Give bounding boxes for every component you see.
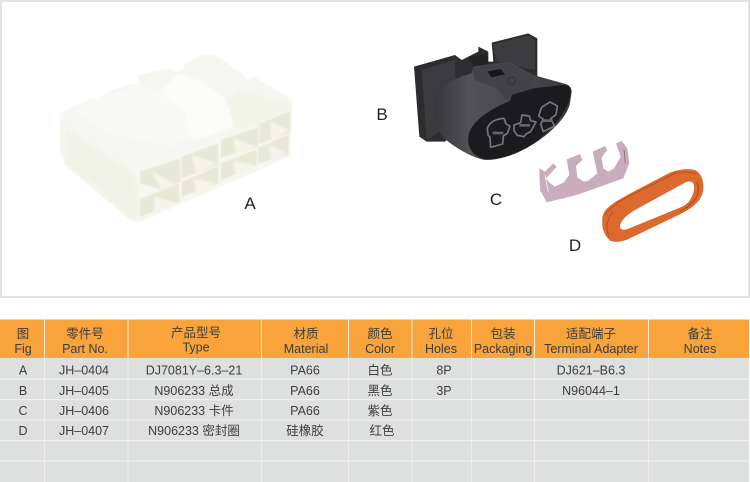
- table header text: Packaging: [474, 342, 532, 356]
- table header text: 颜色: [367, 326, 393, 341]
- row D: 红色: [369, 423, 395, 438]
- table header text: 孔位: [428, 326, 454, 341]
- row A: 白色: [367, 362, 393, 378]
- table header text: Notes: [684, 342, 716, 356]
- row C: N906233 卡件: [154, 404, 234, 418]
- table header text: Type: [182, 340, 210, 354]
- row A: [19, 362, 625, 378]
- row D: D: [18, 424, 28, 438]
- row D: [18, 423, 395, 438]
- row A: JH–0404: [59, 364, 109, 378]
- label C: C: [490, 190, 502, 209]
- row D: N906233 密封圈: [148, 423, 240, 438]
- row A: 8P: [436, 364, 452, 378]
- table header text: Terminal Adapter: [544, 342, 638, 356]
- table header text: 产品型号: [171, 326, 221, 340]
- table header text: 材质: [293, 327, 319, 341]
- 3 pin cavities: [487, 102, 557, 147]
- row B: [19, 383, 620, 398]
- row B: N906233 总成: [154, 384, 234, 398]
- row D: JH–0407: [59, 424, 109, 438]
- row C: C: [18, 404, 28, 418]
- row A: PA66: [290, 364, 320, 378]
- table header text: 包装: [490, 327, 516, 341]
- table header background: [0, 320, 749, 358]
- row C: [18, 403, 393, 418]
- icon: connector A white 8-hole housing: [60, 55, 292, 223]
- label A: A: [244, 194, 256, 213]
- row A: DJ621–B6.3: [557, 364, 625, 378]
- table header text: 图: [17, 327, 29, 341]
- row B: N96044–1: [562, 384, 620, 398]
- row D: 硅橡胶: [286, 423, 324, 438]
- table: parts list: [0, 320, 749, 482]
- row B: 黑色: [367, 383, 393, 398]
- table header text: 适配端子: [566, 327, 616, 341]
- label D: D: [569, 236, 581, 255]
- table header text: 零件号: [66, 327, 104, 341]
- row C: PA66: [290, 404, 320, 418]
- row C: 紫色: [367, 403, 393, 418]
- table header text: 备注: [687, 326, 713, 341]
- row A: DJ7081Y–6.3–21: [146, 364, 242, 378]
- table body background: [0, 358, 749, 482]
- icon: part D orange oval seal: [602, 169, 703, 242]
- table header text: [14, 326, 716, 356]
- row B: PA66: [290, 384, 320, 398]
- row A: A: [19, 364, 28, 378]
- table header text: Color: [365, 342, 395, 356]
- icon: part C lilac clip: [539, 141, 629, 202]
- icon: connector B black 3-pin housing: [414, 33, 572, 160]
- row B: JH–0405: [59, 384, 109, 398]
- row B: 3P: [436, 384, 452, 398]
- row C: JH–0406: [59, 404, 109, 418]
- window cavities: [140, 111, 290, 217]
- table header text: Material: [284, 342, 328, 356]
- panel: product photo area: [1, 1, 749, 297]
- table header text: Fig: [14, 342, 32, 356]
- label B: B: [376, 105, 388, 124]
- table header text: Holes: [425, 342, 457, 356]
- row B: B: [19, 384, 27, 398]
- table header text: Part No.: [62, 342, 108, 356]
